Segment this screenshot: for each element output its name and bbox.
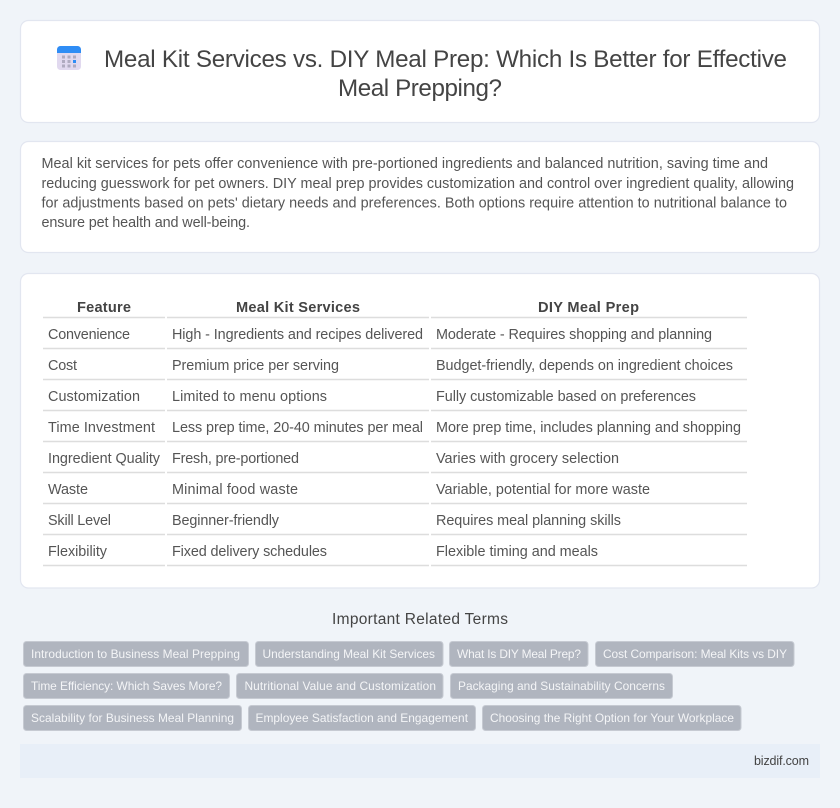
- row: skill level: Skill Level: [48, 513, 111, 529]
- row: time investment: More prep time, includes planning and shopping: [436, 420, 741, 436]
- row: skill level: [48, 513, 621, 529]
- tag list: related terms: Cost Comparison: Meal Kits vs DIY: [603, 647, 787, 661]
- panel: intro: [20, 142, 820, 252]
- row: time investment: Time Investment: [48, 420, 155, 436]
- row: ingredient quality: Varies with grocery selection: [436, 451, 619, 467]
- row: flexibility: Flexibility: [48, 544, 108, 560]
- row: ingredient quality: Ingredient Quality: [48, 451, 161, 467]
- text block: intro paragraph: ensure pet health and well-being.: [42, 215, 250, 231]
- title: Meal Kit Services vs. DIY Meal Prep: Which Is Better for Effective: [104, 46, 787, 73]
- row: skill level: Requires meal planning skills: [436, 513, 621, 529]
- text block: intro paragraph: [42, 156, 794, 231]
- row: waste: Minimal food waste: [172, 482, 298, 498]
- text block: intro paragraph: Meal kit services for pets offer convenience with pre-portioned ingredients and balanced nutrition, saving time and: [42, 156, 768, 172]
- tag list: related terms: Packaging and Sustainability Concerns: [458, 679, 665, 693]
- row: cost: [48, 358, 733, 374]
- table header: Meal Kit Services: [236, 300, 360, 316]
- row: waste: [48, 482, 650, 498]
- footer: bizdif.com: [754, 754, 809, 768]
- row: flexibility: Fixed delivery schedules: [172, 544, 327, 560]
- tag list: related terms: Scalability for Business Meal Planning: [31, 711, 234, 725]
- row: convenience: Convenience: [48, 327, 130, 343]
- heading: important related terms: Important Related Terms: [332, 611, 508, 628]
- tag list: related terms: Understanding Meal Kit Services: [262, 647, 435, 661]
- row: convenience: High - Ingredients and recipes delivered: [172, 327, 423, 343]
- row: cost: Budget-friendly, depends on ingredient choices: [436, 358, 733, 374]
- tag list: related terms: Time Efficiency: Which Saves More?: [31, 679, 222, 693]
- panel: comparison table: [20, 274, 820, 588]
- row: time investment: Less prep time, 20-40 minutes per meal: [172, 420, 423, 436]
- footer: [20, 744, 820, 778]
- row: customization: [48, 389, 696, 405]
- row: flexibility: Flexible timing and meals: [436, 544, 598, 560]
- text block: intro paragraph: reducing guesswork for pet owners. DIY meal prep provides customization and control over ingredient quality, allowing: [42, 176, 794, 192]
- row: waste: Waste: [48, 482, 88, 498]
- row: customization: Limited to menu options: [172, 389, 327, 405]
- text block: intro paragraph: for adjustments based on pets' dietary needs and preferences. Both options require attention to nutritional balance to: [42, 196, 787, 212]
- title: Meal Prepping?: [338, 75, 502, 102]
- row: cost: Cost: [48, 358, 77, 374]
- tag list: related terms: Introduction to Business Meal Prepping: [31, 647, 240, 661]
- row: ingredient quality: [48, 451, 619, 467]
- row: flexibility: [48, 544, 598, 560]
- table header: DIY Meal Prep: [538, 300, 639, 316]
- icon: calendar: [57, 46, 81, 70]
- row: cost: Premium price per serving: [172, 358, 339, 374]
- title: [104, 46, 787, 102]
- panel: header: [20, 20, 820, 122]
- row: customization: Fully customizable based on preferences: [436, 389, 696, 405]
- tag list: related terms: Nutritional Value and Customization: [244, 679, 436, 693]
- row: convenience: [48, 327, 712, 343]
- tag list: related terms: What Is DIY Meal Prep?: [457, 647, 581, 661]
- table header: [77, 300, 639, 316]
- row: ingredient quality: Fresh, pre-portioned: [172, 451, 299, 467]
- tag list: related terms: Employee Satisfaction and Engagement: [256, 711, 469, 725]
- tag list: related terms: Choosing the Right Option for Your Workplace: [490, 711, 734, 725]
- row: waste: Variable, potential for more waste: [436, 482, 650, 498]
- tag list: related terms: [24, 642, 794, 730]
- row: time investment: [48, 420, 741, 436]
- row: skill level: Beginner-friendly: [172, 513, 280, 529]
- row: customization: Customization: [48, 389, 140, 405]
- table header: Feature: [77, 300, 131, 316]
- row: convenience: Moderate - Requires shopping and planning: [436, 327, 712, 343]
